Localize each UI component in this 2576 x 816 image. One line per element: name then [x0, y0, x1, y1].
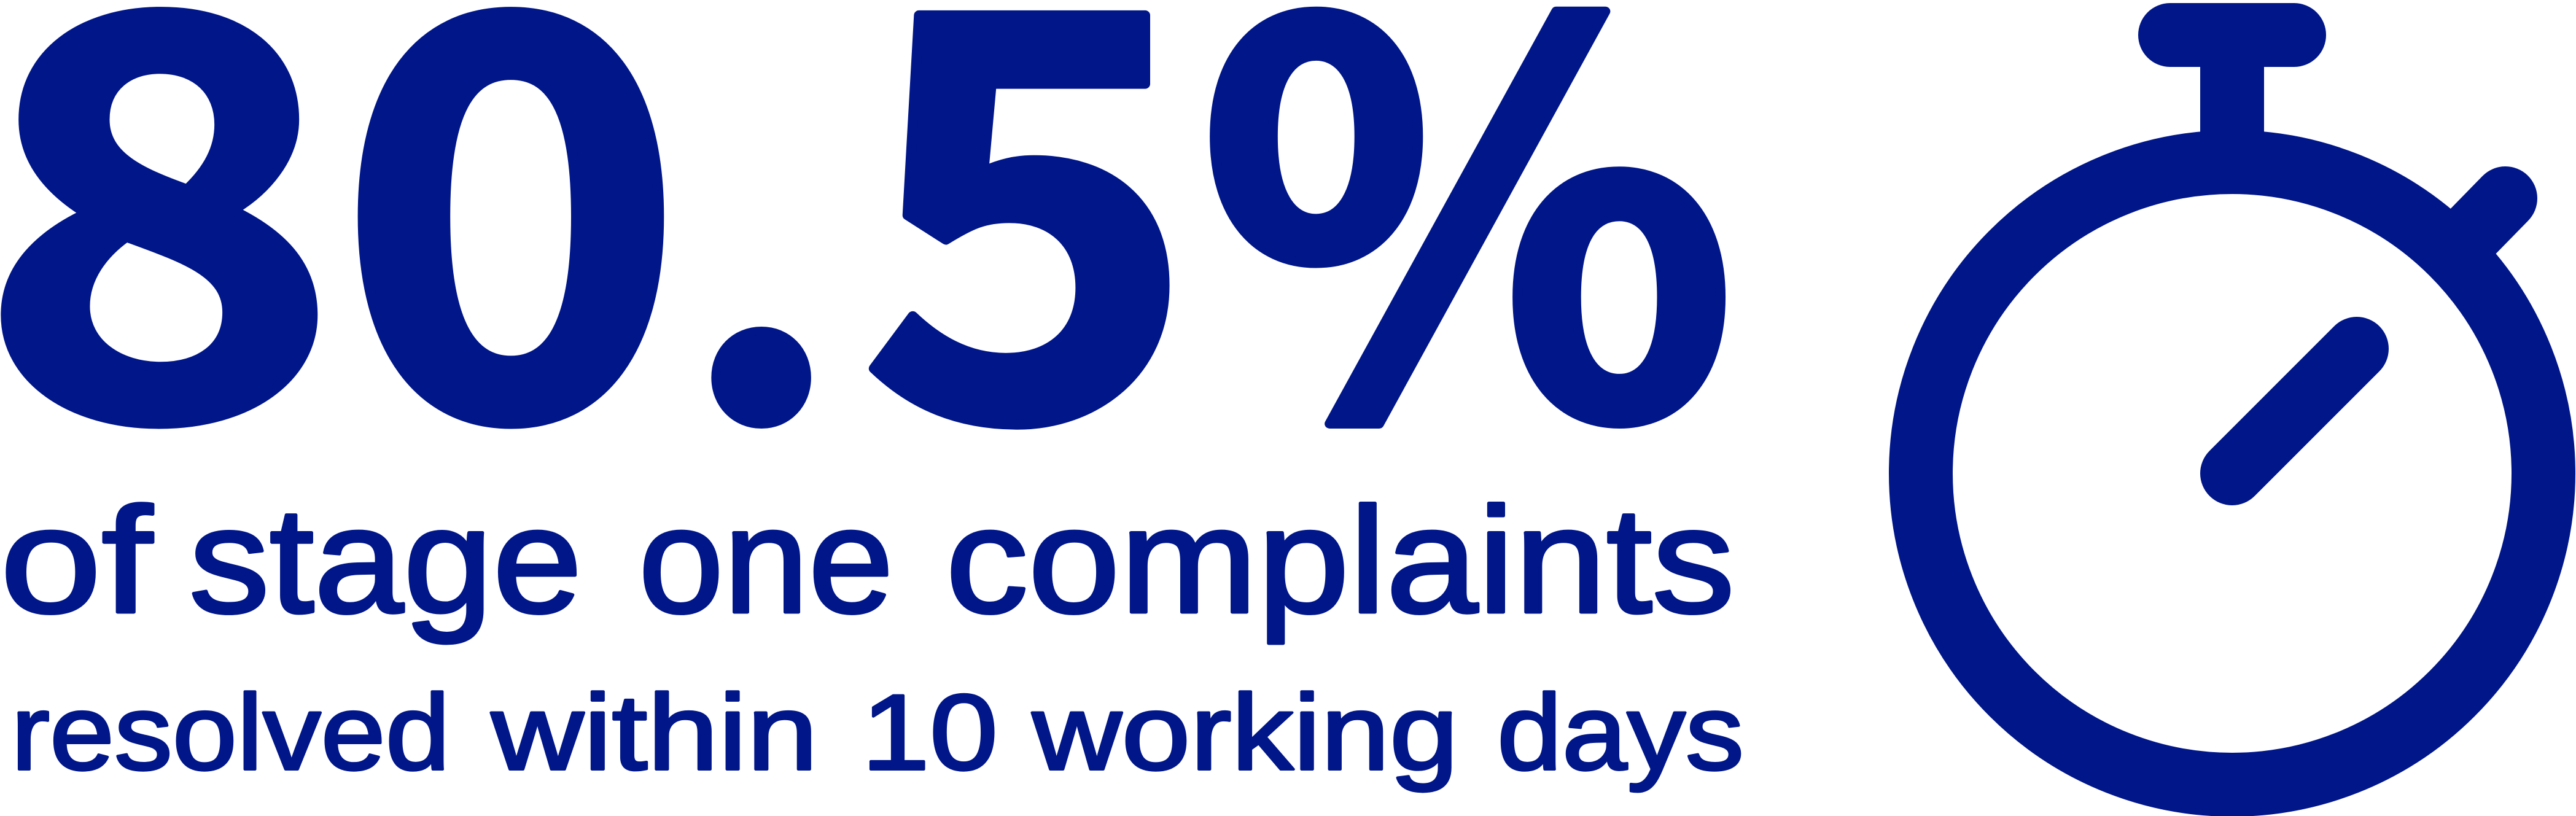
- stopwatch side knob: [2453, 198, 2505, 252]
- headline figure: 80.5%: [0, 0, 1738, 578]
- subtitle line: of stage one complaints: [0, 476, 1735, 644]
- stopwatch hand: [2232, 349, 2357, 473]
- subtitle line: of stage one complaints: complaints: [946, 476, 1735, 644]
- subtitle line: resolved within 10 working days: within: [491, 673, 818, 793]
- subtitle line: of stage one complaints: one: [639, 476, 893, 644]
- stopwatch stem: [2200, 35, 2264, 184]
- subtitle line: of stage one complaints: stage: [189, 476, 582, 644]
- subtitle line: resolved within 10 working days: days: [1497, 673, 1744, 793]
- subtitle line: of stage one complaints: of: [0, 476, 153, 644]
- subtitle line: resolved within 10 working days: [11, 673, 1744, 793]
- subtitle line: resolved within 10 working days: 10: [862, 673, 998, 793]
- subtitle line: resolved within 10 working days: working: [1032, 673, 1458, 793]
- stopwatch dial ring: [1921, 162, 2543, 785]
- subtitle line: resolved within 10 working days: resolved: [11, 673, 450, 793]
- icon: stopwatch: [1921, 35, 2543, 785]
- stopwatch top button: [2170, 3, 2294, 67]
